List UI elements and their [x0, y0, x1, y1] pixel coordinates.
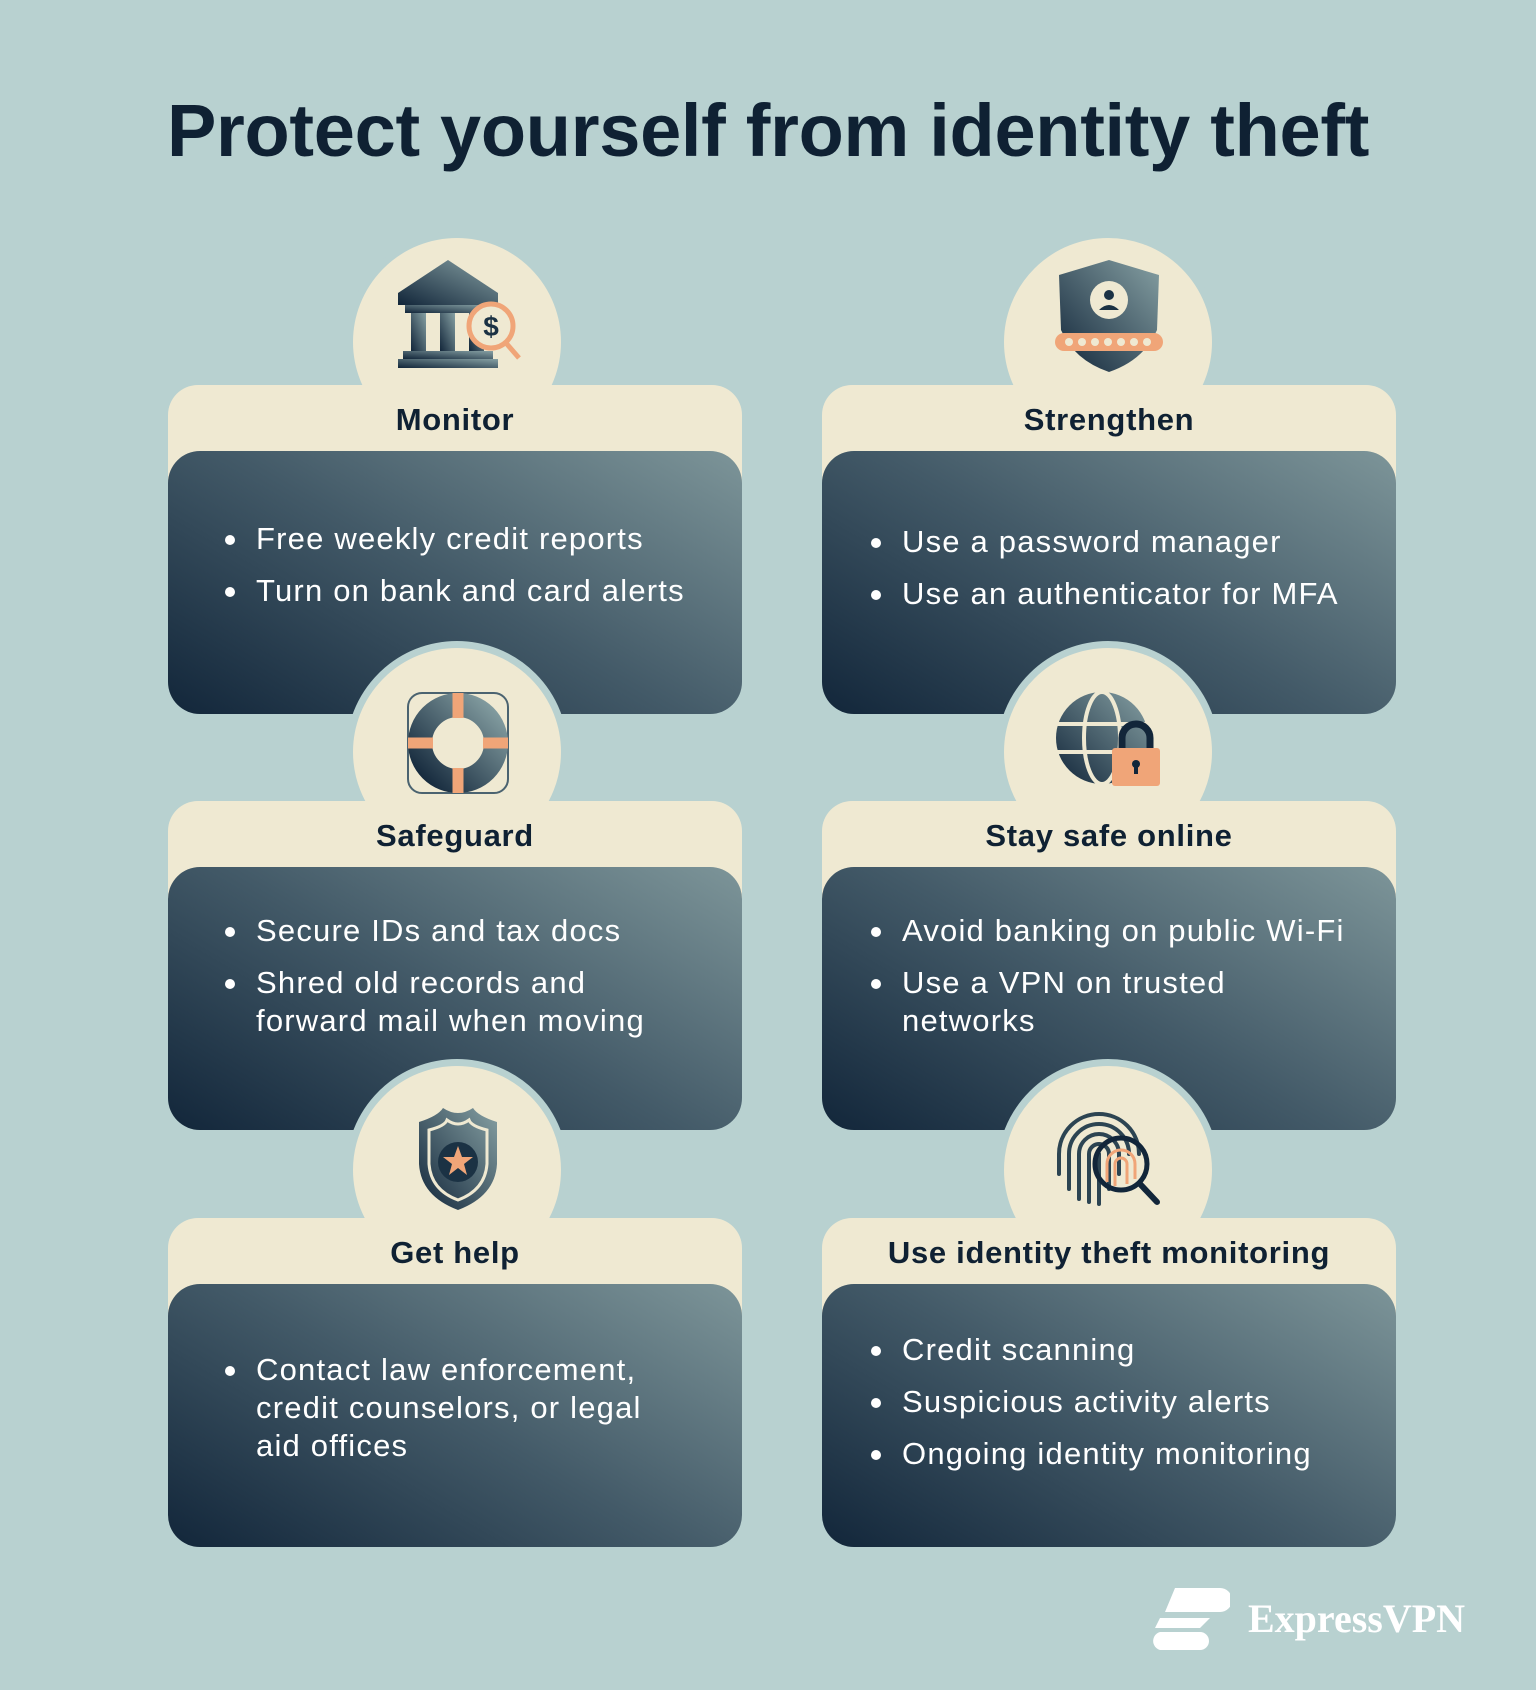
icon: police badge — [419, 1108, 497, 1210]
panel: Strengthen bullets: Use an authenticator for MFA — [902, 576, 1339, 611]
panel: Get help bullets: credit counselors, or legal — [256, 1390, 642, 1425]
panel: Monitor bullets: Free weekly credit reports — [256, 521, 644, 556]
icon: fingerprint with magnifier — [1057, 1112, 1160, 1206]
card: Stay safe online — [822, 801, 1396, 1130]
card: Monitor — [168, 385, 742, 714]
heading: Safeguard — [168, 801, 742, 901]
panel: identity monitoring bullets: Credit scanning — [902, 1332, 1135, 1367]
heading: Strengthen: Strengthen — [1024, 402, 1194, 437]
panel: Monitor bullets — [168, 451, 742, 714]
card: Safeguard — [168, 801, 742, 1130]
panel: Get help bullets: aid offices — [256, 1428, 408, 1463]
panel: Get help bullets — [168, 1284, 742, 1547]
card: Strengthen — [822, 385, 1396, 714]
title: Protect yourself from identity theft — [167, 89, 1369, 172]
heading: Get help — [168, 1218, 742, 1318]
heading: Get help: Get help — [390, 1235, 520, 1270]
icon circle: strengthen — [997, 231, 1219, 453]
panel: Stay safe online bullets: Avoid banking on public Wi-Fi — [902, 913, 1345, 948]
card: Use identity theft monitoring — [822, 1218, 1396, 1547]
icon circle: stay safe online — [997, 641, 1219, 863]
panel: identity monitoring bullets: Ongoing identity monitoring — [902, 1436, 1312, 1471]
heading: Stay safe online — [822, 801, 1396, 901]
panel: identity monitoring bullets — [822, 1284, 1396, 1547]
icon circle: monitor — [346, 231, 568, 453]
panel: Stay safe online bullets: Use a VPN on trusted — [902, 965, 1226, 1000]
icon: bank with magnifier — [398, 260, 521, 368]
heading: Safeguard: Safeguard — [376, 818, 534, 853]
text: ExpressVPN: ExpressVPN — [1248, 1596, 1465, 1641]
heading: Use identity theft monitoring: Use identity theft monitoring — [888, 1235, 1330, 1270]
panel: Safeguard bullets: Secure IDs and tax docs — [256, 913, 621, 948]
card: Get help — [168, 1218, 742, 1547]
logo: ExpressVPN — [1153, 1588, 1465, 1650]
panel: Safeguard bullets: forward mail when moving — [256, 1003, 645, 1038]
heading: Monitor: Monitor — [396, 402, 514, 437]
icon circle: safeguard — [346, 641, 568, 863]
heading: Stay safe online: Stay safe online — [985, 818, 1233, 853]
panel: Stay safe online bullets: networks — [902, 1003, 1036, 1038]
heading: Strengthen — [822, 385, 1396, 485]
panel: Strengthen bullets: Use a password manager — [902, 524, 1282, 559]
icon: shield with password — [1055, 260, 1163, 372]
icon circle: identity monitoring — [997, 1059, 1219, 1281]
panel: Safeguard bullets — [168, 867, 742, 1130]
panel: identity monitoring bullets: Suspicious activity alerts — [902, 1384, 1271, 1419]
icon: lifebuoy — [407, 692, 509, 794]
panel: Strengthen bullets — [822, 451, 1396, 714]
panel: Get help bullets: Contact law enforcement, — [256, 1352, 636, 1387]
icon: globe with padlock — [1056, 692, 1160, 786]
icon circle: get help — [346, 1059, 568, 1281]
icon: bank with magnifier: $ — [483, 311, 499, 342]
panel: Safeguard bullets: Shred old records and — [256, 965, 586, 1000]
heading: Monitor — [168, 385, 742, 485]
panel: Stay safe online bullets — [822, 867, 1396, 1130]
icon: ExpressVPN mark — [1153, 1588, 1230, 1650]
panel: Monitor bullets: Turn on bank and card alerts — [256, 573, 685, 608]
heading: Use identity theft monitoring — [822, 1218, 1396, 1318]
